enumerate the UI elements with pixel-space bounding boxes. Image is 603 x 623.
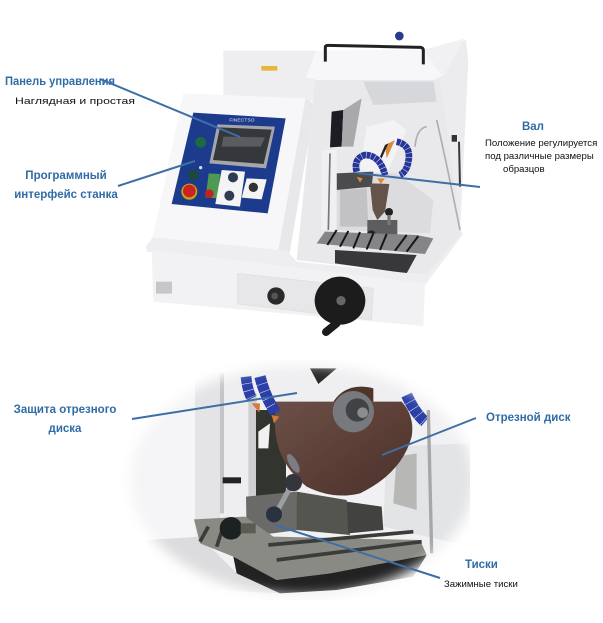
label: disc guard: Защита отрезного (14, 404, 116, 416)
leader line: disc guard (132, 393, 297, 419)
cutting chamber (297, 80, 462, 275)
label: disc guard: диска (49, 423, 82, 435)
photo: cutting disc close-up (120, 360, 470, 600)
photo: cutting machine (146, 32, 468, 332)
cutting disc (275, 402, 412, 496)
coolant hoses (246, 377, 252, 398)
clamp guard (360, 120, 407, 173)
ball knob (220, 517, 242, 540)
vise (367, 220, 397, 238)
vise handle (276, 488, 291, 510)
label: cutting disc: Отрезной диск (486, 412, 571, 424)
photo: cutting machine: FINECTSO (229, 118, 255, 124)
machine rear housing (223, 51, 317, 102)
control cabinet (153, 93, 315, 260)
label: vise (444, 559, 518, 590)
disc guard (253, 367, 407, 403)
label: control panel (5, 76, 135, 107)
heading: vise: Тиски (465, 559, 498, 571)
handwheel (315, 277, 365, 325)
label: software interface: Программный (25, 170, 107, 182)
knob (267, 287, 285, 305)
heading: shaft: Вал (522, 121, 544, 133)
T-slot table (194, 517, 427, 580)
leader line: vise (275, 525, 440, 578)
text: clear and simple: Наглядная и простая (15, 96, 135, 107)
hand side post (452, 135, 457, 142)
control panel (172, 113, 286, 213)
text: shaft description: образцов (503, 164, 545, 175)
leader line: shaft (357, 173, 480, 187)
right support (383, 443, 470, 547)
leader line: software interface (118, 161, 195, 186)
hood handle (325, 45, 423, 64)
yellow label (261, 66, 277, 71)
leader line: cutting disc (382, 418, 476, 455)
text: clamping vise: Зажимные тиски (444, 579, 518, 590)
leader line: control panel (100, 79, 240, 137)
label: software interface: интерфейс станка (14, 189, 118, 201)
machine base (146, 233, 463, 285)
machine hood (306, 49, 443, 80)
machine side wall (433, 40, 468, 233)
T-slot table (317, 232, 433, 254)
coolant hoses (356, 155, 385, 175)
white column (195, 373, 255, 523)
text: shaft description: Положение регулируется (485, 138, 597, 149)
disc flange nut (333, 391, 374, 432)
photo background (195, 366, 463, 594)
heading: control panel: Панель управления (5, 76, 115, 88)
cutting disc edge (370, 183, 389, 220)
label: shaft (485, 121, 597, 175)
text: shaft description: под различные размеры (485, 151, 594, 162)
vise jaws (246, 492, 298, 537)
